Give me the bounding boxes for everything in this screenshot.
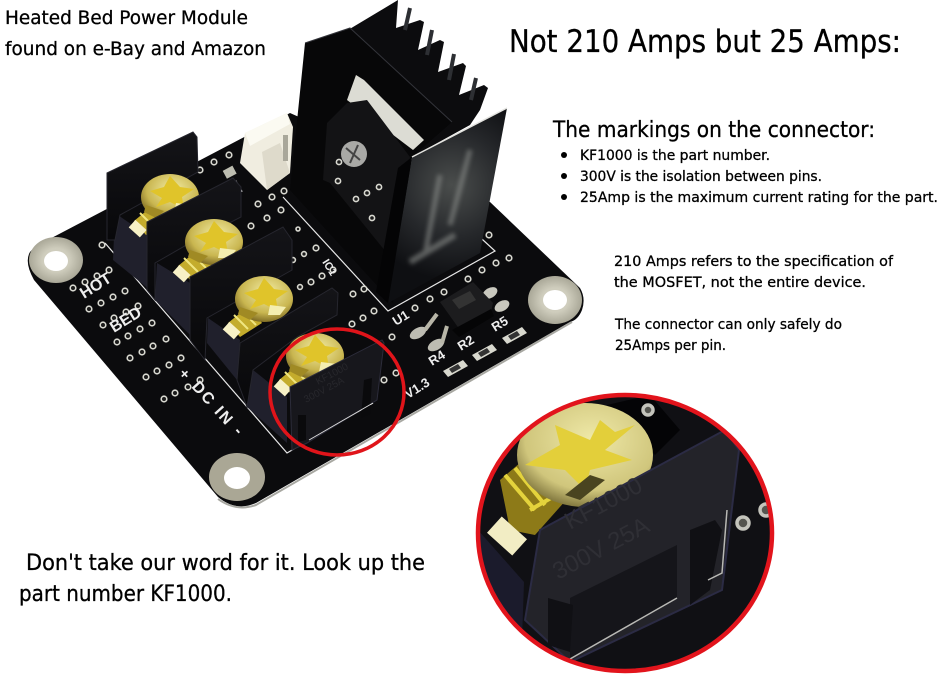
magnified connector view: 300V 25A [548,512,654,585]
silkscreen labels: R2 [455,332,477,354]
heat sink with MOSFET [290,0,507,303]
LED [223,166,237,179]
silkscreen labels: BED [107,304,145,336]
magnified silkscreen line [570,510,727,659]
magnified plate [525,430,739,662]
MOSFET body [323,100,410,257]
heading: module name: found on e-Bay and Amazon [5,38,266,60]
bullet list: KF1000 is the part number. [580,148,770,164]
silkscreen labels: IC1 [319,257,339,278]
note: look up part number: Don't take our word for it. Look up the [26,550,425,576]
front plate with markings [290,340,384,450]
SMD resistors [443,327,527,377]
screw 2 [173,219,243,282]
heading: module name: Heated Bed Power Module [5,7,248,29]
magnified side wall [480,532,524,628]
plate 3 [190,227,292,360]
magnified connector view [470,385,780,680]
bullet list [561,148,938,206]
plate 1 [107,132,198,240]
note: look up part number: part number KF1000. [19,581,232,607]
bullet list: 25Amp is the maximum current rating for the part. [580,190,938,206]
screw 1 [129,174,199,237]
magnified ribs [690,520,722,605]
magnified plate window [570,545,677,658]
note: MOSFET specification: 210 Amps refers to the specification of [614,254,894,270]
magnified vias [643,405,772,529]
board: circuit board [28,113,584,506]
fins [348,0,488,157]
via holes [70,152,512,402]
MOSFET screw [341,141,367,167]
title: Not 210 Amps but 25 Amps: [509,24,901,60]
silkscreen labels: + [175,365,194,383]
magnified markings: KF1000 [560,472,647,535]
silkscreen labels: - [230,423,246,439]
note: connector rating: The connector can only safely do [614,317,842,333]
note: connector rating: 25Amps per pin. [615,338,726,354]
silkscreen labels: HOT [77,270,115,302]
red circle highlight [270,329,404,455]
chip and solder pads [408,282,511,354]
plate 4 [237,288,338,407]
silkscreen outlines [105,197,495,453]
silkscreen labels: V1.3 [402,375,432,402]
magnified screw [487,403,653,556]
magnified circle outline [478,395,772,671]
front plate with markings: KF1000 [314,361,351,388]
terminal block [107,132,384,450]
silkscreen labels: D2 [228,178,246,196]
silkscreen labels: DC IN [188,378,235,428]
bullet list: 300V is the isolation between pins. [580,169,822,185]
washers: mounting holes [29,237,582,501]
left wall and inner face [290,28,452,303]
screw 4 [274,333,344,396]
silkscreen labels: R5 [489,313,511,335]
subheading: connector markings: The markings on the connector: [552,118,875,143]
side walls [113,213,150,290]
right face [388,108,507,303]
silkscreen labels [77,178,511,439]
silkscreen labels: U1 [390,307,412,329]
white JST connector [240,113,293,190]
silkscreen labels: R4 [426,347,448,369]
front plate with markings: 300V 25A [302,375,346,406]
screw 3 [223,276,293,339]
product photo: power module board [28,0,584,507]
note: MOSFET specification: the MOSFET, not the entire device. [614,275,866,291]
thermal pad [347,75,424,150]
magnified slot above the screw [607,395,680,455]
plate 2 [147,178,241,300]
